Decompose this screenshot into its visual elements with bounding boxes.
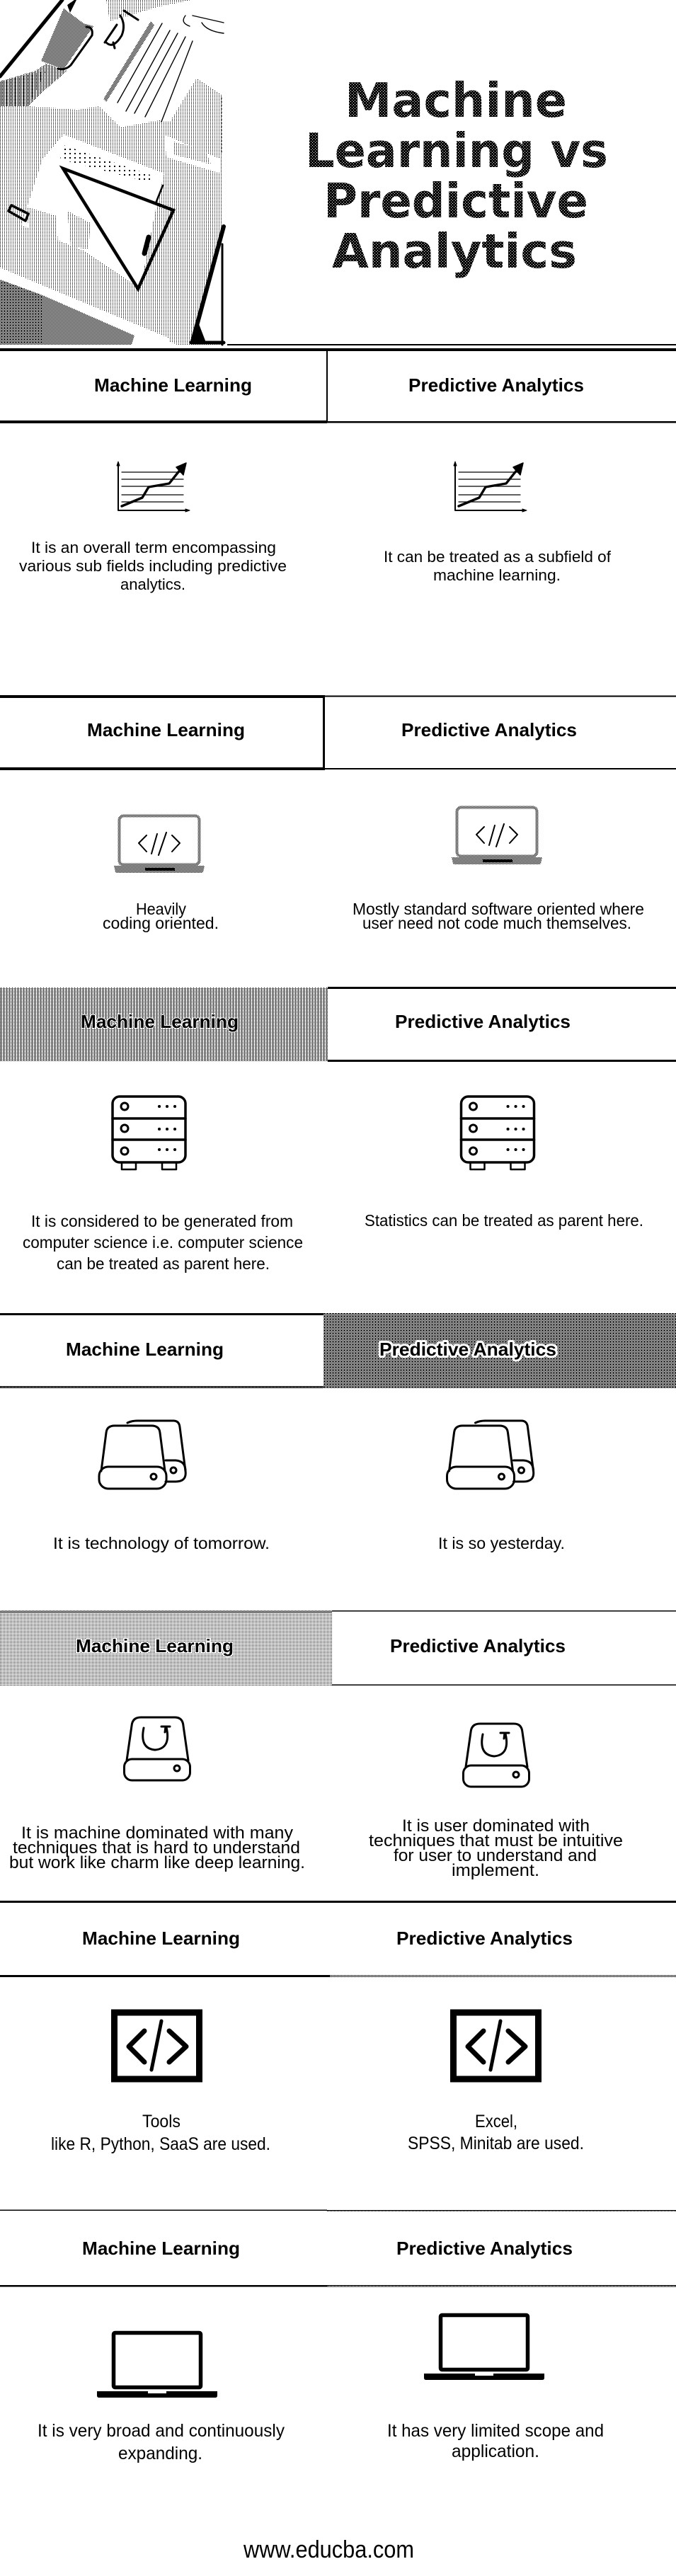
icon: code box (453, 2013, 538, 2079)
text: machine learning description: techniques that is hard to understand (13, 1838, 300, 1857)
panel: row 5 dominance (0, 1610, 676, 1880)
text: machine learning description (103, 900, 219, 932)
heading: Predictive Analytics: Predictive Analytics (395, 1011, 571, 1032)
heading: Predictive Analytics: Predictive Analytics (396, 2238, 573, 2259)
icon: laptop with code (452, 807, 542, 864)
text: predictive analytics description: techniques that must be intuitive (369, 1831, 623, 1850)
heading: Predictive Analytics: Predictive Analytics (396, 1928, 573, 1949)
text: machine learning description: coding oriented. (103, 914, 219, 932)
text: predictive analytics description: machine learning. (433, 566, 561, 584)
panel: row 6 tools (0, 1901, 676, 2154)
text: machine learning description: It is considered to be generated from (31, 1212, 293, 1230)
text: machine learning description: can be treated as parent here. (57, 1254, 270, 1273)
text: predictive analytics description: implement. (452, 1861, 539, 1880)
title (305, 73, 608, 279)
heading: Predictive Analytics: Predictive Analytics (390, 1635, 566, 1656)
icon: laptop with code (114, 815, 205, 873)
heading: Machine Learning: Machine Learning (94, 374, 252, 396)
title: Learning vs (305, 123, 608, 178)
text: machine learning description: expanding. (118, 2444, 202, 2463)
heading: Machine Learning: Machine Learning (76, 1635, 234, 1656)
text: predictive analytics description: SPSS, Minitab are used. (408, 2134, 584, 2153)
text: machine learning description (23, 1212, 303, 1273)
text: machine learning description (19, 539, 287, 593)
text: predictive analytics description (369, 1816, 623, 1880)
text: predictive analytics description (384, 548, 612, 584)
panel: row 1 overall term (0, 348, 676, 593)
title: Machine (345, 73, 567, 128)
text: machine learning description (38, 2421, 285, 2463)
text: machine learning description: Tools (142, 2112, 181, 2131)
text: machine learning description: It is technology of tomorrow. (53, 1534, 270, 1552)
footer: website: www.educba.com (243, 2536, 414, 2563)
heading: Predictive Analytics: Predictive Analytics (401, 719, 577, 740)
icon: laptop (424, 2315, 544, 2380)
icon: code box (115, 2013, 200, 2079)
heading: Predictive Analytics: Predictive Analytics (379, 1339, 556, 1360)
icon: drive with refresh arrow (125, 1717, 190, 1780)
text: predictive analytics description: application. (452, 2442, 539, 2461)
text: predictive analytics description (408, 2112, 584, 2153)
text: machine learning description: analytics. (120, 576, 185, 593)
text: predictive analytics description: Mostly standard software oriented where (353, 900, 644, 918)
heading: Machine Learning: Machine Learning (82, 1928, 240, 1949)
text: machine learning description: various sub fields including predictive (19, 557, 287, 575)
text: machine learning description (9, 1824, 305, 1872)
panel: row 4 timeline (0, 1313, 676, 1552)
text: predictive analytics description: Excel, (475, 2112, 517, 2131)
text: predictive analytics description: It can be treated as a subfield of (384, 548, 612, 566)
text: machine learning description: It is very broad and continuously (38, 2421, 285, 2441)
icon: growth chart (117, 462, 190, 512)
text: machine learning description (51, 2112, 270, 2154)
text: predictive analytics description (387, 2421, 604, 2461)
heading: Machine Learning: Machine Learning (87, 719, 245, 740)
text: machine learning description: It is machine dominated with many (21, 1824, 293, 1843)
icon: hard drives (447, 1421, 534, 1489)
icon: server rack (113, 1097, 185, 1169)
panel: row 2 coding (0, 695, 676, 932)
text: predictive analytics description: for user to understand and (394, 1846, 597, 1865)
text: machine learning description: It is an overall term encompassing (31, 539, 276, 556)
icon: server rack (462, 1097, 534, 1169)
heading: Predictive Analytics: Predictive Analytics (408, 374, 584, 396)
icon: drive with refresh arrow (463, 1724, 529, 1787)
text: predictive analytics description: It has very limited scope and (387, 2421, 604, 2441)
text: predictive analytics description: Statistics can be treated as parent here. (365, 1211, 643, 1230)
photo: desk with papers and set square (0, 0, 224, 345)
text: machine learning description: but work like charm like deep learning. (9, 1853, 305, 1872)
title: Analytics (332, 224, 577, 279)
icon: growth chart (454, 462, 527, 512)
heading: Machine Learning: Machine Learning (82, 2238, 240, 2259)
heading: Machine Learning: Machine Learning (66, 1339, 224, 1360)
panel: row 3 origin (0, 987, 676, 1273)
text: machine learning description: Heavily (136, 900, 186, 918)
text: predictive analytics description: It is user dominated with (402, 1816, 590, 1836)
text: predictive analytics description: It is so yesterday. (438, 1534, 565, 1552)
heading: Machine Learning: Machine Learning (81, 1011, 239, 1032)
text: predictive analytics description: user need not code much themselves. (362, 914, 631, 932)
icon: laptop (97, 2333, 217, 2398)
panel: row 7 scope (0, 2210, 676, 2463)
title: Predictive (323, 173, 588, 229)
text: predictive analytics description (353, 900, 644, 932)
photo line work (0, 0, 224, 345)
text: machine learning description: like R, Python, SaaS are used. (51, 2134, 270, 2154)
icon: hard drives (99, 1421, 185, 1489)
text: machine learning description: computer science i.e. computer science (23, 1233, 303, 1252)
